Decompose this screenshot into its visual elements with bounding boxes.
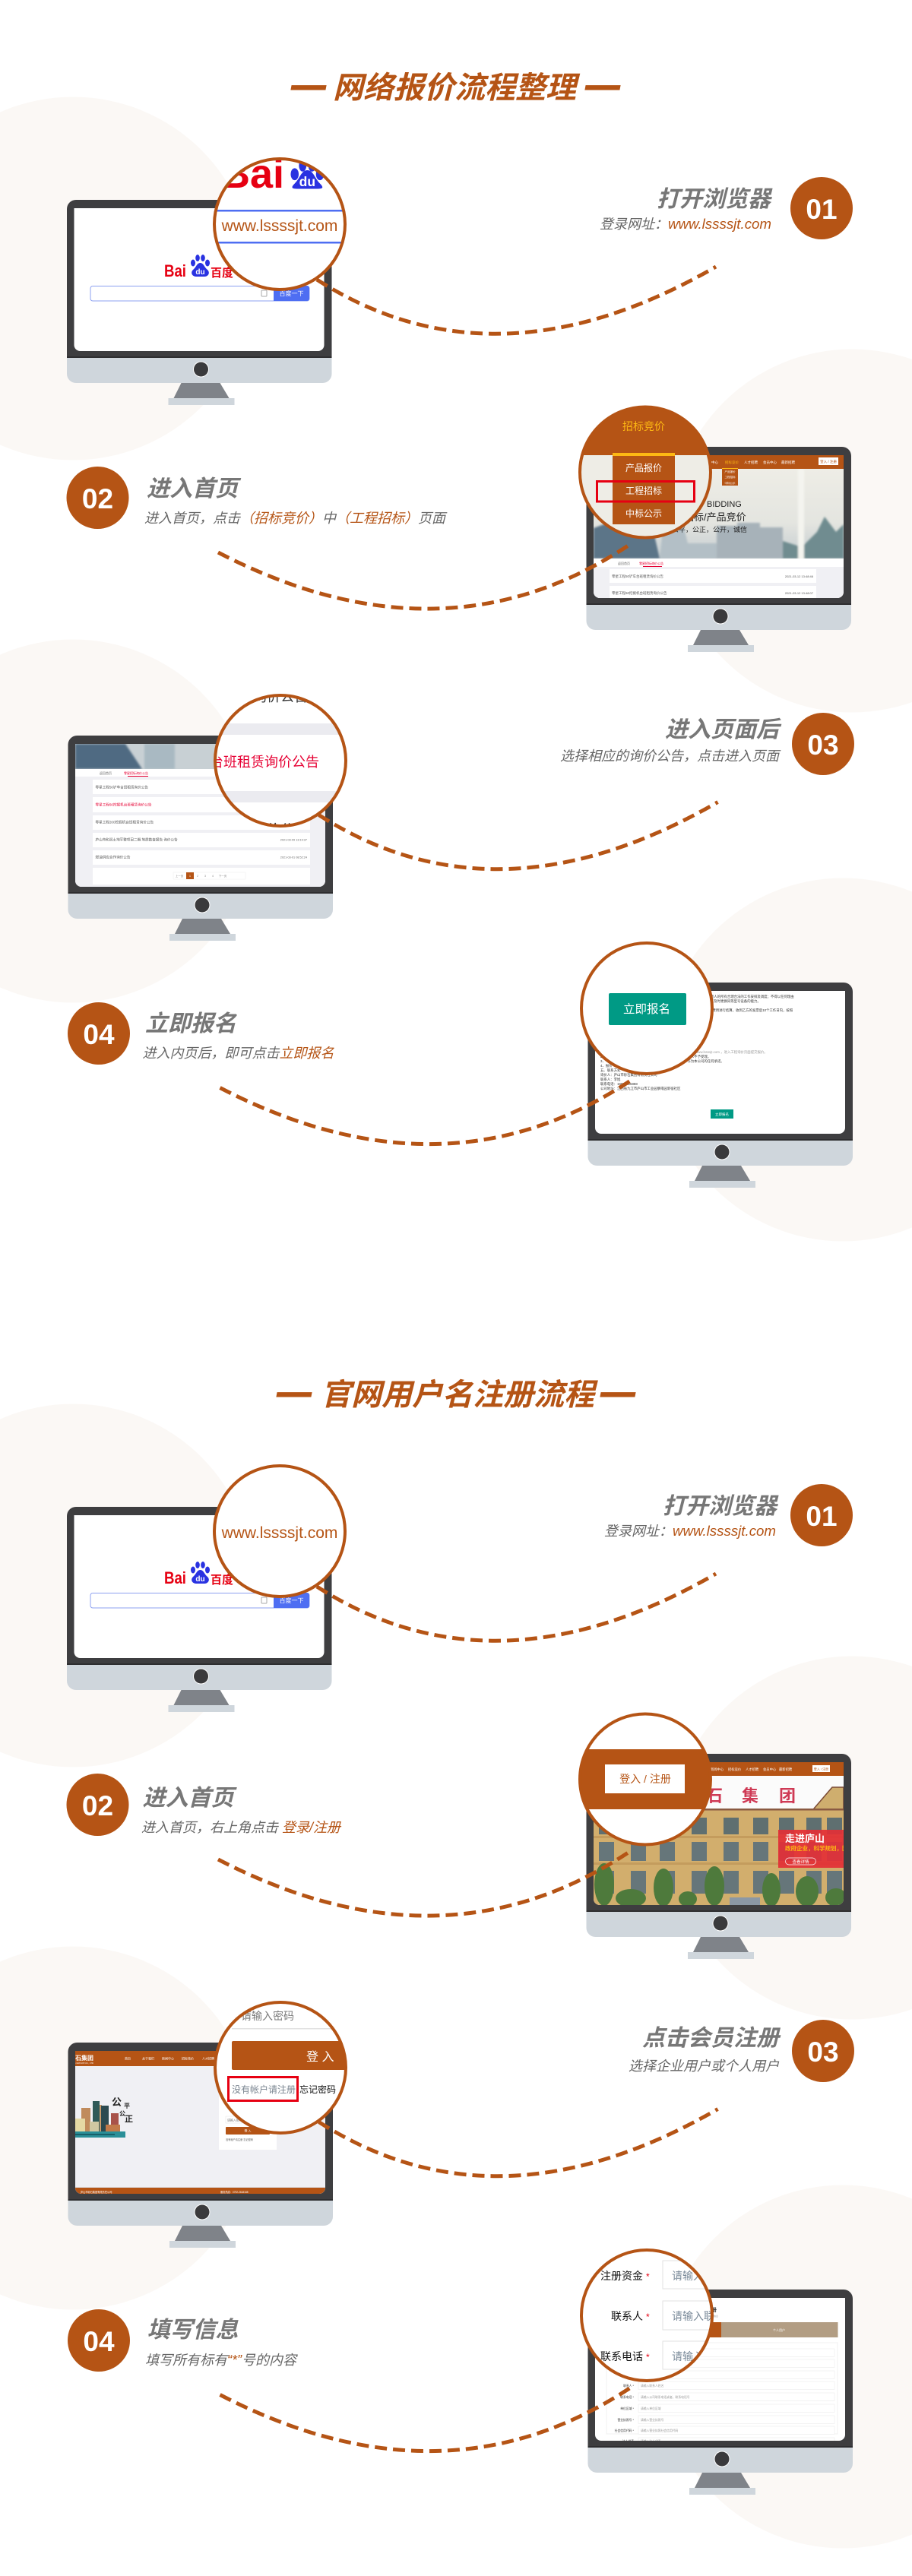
monitor 4: notice detail: 台半数据，每月5号双方就上月费用进行结算，收到乙方的发票后10个工作日内，按照 (600, 1008, 793, 1013)
monitor 6: group home page: 政府企业，科学规划，因地制宜 (785, 1844, 865, 1852)
magnifier 8: required fields: 请输入联系人 (672, 2310, 736, 2322)
monitor 7: login page: 庐山市砂石集团有限责任公司 (81, 2190, 112, 2194)
magnifier 2: bidding menu (578, 403, 714, 540)
monitor 7: login page: 登 入 (244, 2128, 252, 2132)
step 02 text: 进入首页 (147, 476, 242, 502)
magnifier 1: baidu address: Bai (220, 151, 284, 197)
monitor 6: group home page: 人才招聘 (746, 1767, 759, 1772)
monitor 2: bidding page: 产品报价 (725, 470, 736, 473)
magnifier 7: register link: 没有帐户请注册 (232, 2084, 296, 2095)
monitor 2: bidding page: 零星招标询价公告 (639, 561, 663, 565)
monitor 5: baidu home page: du (195, 1575, 205, 1584)
monitor 2: bidding page (587, 447, 851, 652)
monitor 8: registration form: 会员注册 (695, 2306, 717, 2313)
monitor 4: notice detail: 公司地址：江西省九江市庐山市工业园蓼南园新宿社区 (600, 1086, 681, 1091)
step 02 badge: 02 (82, 1790, 113, 1821)
step 04 text: 立即报名 (145, 1011, 238, 1036)
magnifier 5: site address: www.lssssjt.com (221, 1524, 337, 1542)
monitor 4: notice detail: 2、 询报价者，询价人不予受理。 (600, 1054, 711, 1059)
monitor 7: login page: 没有帐户请注册 忘记密码 (226, 2138, 253, 2141)
title: section one (291, 67, 620, 105)
dashed connector 8 (220, 2388, 631, 2451)
magnifier 3: notice title (214, 694, 347, 828)
step 01 badge (790, 1484, 853, 1546)
step 01 text: 打开浏览器 (657, 187, 773, 212)
title: section one: — (585, 67, 620, 104)
monitor 5: baidu home page: 百度 (211, 1573, 233, 1587)
monitor 7: login page: 招标竞价 (182, 2056, 194, 2061)
step 04 badge (68, 2309, 130, 2372)
monitor 2: bidding page: 登入 / 注册 (820, 459, 837, 464)
monitor 3: notice list: 1 (189, 875, 191, 878)
monitor 8: registration form: 社会信用代码 * (615, 2429, 635, 2432)
monitor 2: bidding page: 中标公示 (725, 481, 736, 485)
step 01 text (604, 1494, 779, 1539)
dashed connector 4 (220, 1081, 631, 1144)
title: section two: 官网用户名注册流程 (321, 1378, 598, 1412)
step 03 text (629, 2026, 781, 2074)
magnifier 4: register button (581, 942, 713, 1074)
monitor 2: bidding page: 招标竞价 (725, 460, 739, 465)
monitor 7: login page: 平 (124, 2103, 130, 2109)
monitor 2: bidding page: 公平，公正，公开，诚信 (672, 525, 747, 533)
monitor 7: login page: 公 (119, 2110, 125, 2117)
monitor 3: notice list: 2021-03-01 08:52:24 (280, 856, 307, 859)
monitor 7: login page: 请输入密码 (227, 2119, 242, 2122)
monitor 4: notice detail: 联系电话：19979026888 (600, 1081, 638, 1087)
magnifier 3: notice title: 机台班租赁询价公告 (196, 755, 319, 770)
monitor 3: notice list: 3 (204, 875, 206, 878)
monitor 8: registration form: 单位区域 * (620, 2407, 635, 2410)
monitor 4: notice detail: 配合我公司任命的现场管理负责人的所有合理合法的工作安排及调度；不得以任何理由 (600, 994, 794, 999)
magnifier 8: required fields: 联系电话 (600, 2350, 643, 2362)
monitor 3: notice list: 庐山市和润土地平整项目二期 地质勘查报告 询价公告 (96, 837, 178, 842)
monitor 2: bidding page: 2021-03-12 13:48:46 (785, 574, 814, 578)
monitor 3: notice list: 燃油供应合作询价公告 (96, 854, 131, 860)
step 04 text (145, 2318, 298, 2368)
monitor 8: registration form: 联系人 * (623, 2384, 635, 2388)
monitor 4: notice detail: 联系人：李旭 (600, 1077, 621, 1082)
monitor 1: baidu home page: Bai (164, 261, 186, 280)
monitor 6: group home page: 新闻中心 (711, 1767, 724, 1772)
monitor 5: baidu home page (67, 1507, 331, 1712)
step 02 badge: 02 (82, 483, 113, 514)
step 03 badge: 03 (807, 2036, 839, 2068)
step 04 text: 填写所有标有“*”号的内容 (145, 2353, 298, 2368)
dashed connector 6 (218, 1852, 629, 1916)
monitor 2: bidding page: 最新招聘 (781, 460, 795, 465)
monitor 7: login page: 首页 (125, 2056, 131, 2061)
magnifier 2: bidding menu: 招标竞价 (622, 420, 665, 432)
step 03 text: 选择相应的询价公告，点击进入页面 (560, 748, 781, 764)
step 01 text: 登录网址：www.lssssjt.com (600, 216, 771, 232)
monitor 8: registration form: 请输入单位区域 (641, 2407, 661, 2410)
monitor 7: login page: 砂石集团 (69, 2054, 93, 2062)
monitor 7: login page: STONE GROUP CO., LTD (68, 2062, 93, 2065)
monitor 6: group home page: 石 (706, 1786, 723, 1805)
monitor 2: bidding page: 零星工程60挖掘机台班租赁询价公告 (612, 590, 667, 596)
magnifier 8: required fields: * (646, 2312, 650, 2322)
step 04 badge (68, 1002, 130, 1065)
monitor 5: baidu home page: 百度一下 (280, 1597, 304, 1604)
title: section two: — (600, 1374, 635, 1411)
magnifier 2: bidding menu: 工程招标 (625, 485, 662, 496)
step 04 badge: 04 (83, 2326, 115, 2357)
step 03 badge: 03 (807, 729, 839, 761)
monitor 4: notice detail (588, 983, 853, 1188)
monitor 3: notice list: 下一页 (219, 875, 227, 878)
magnifier 8: required fields: 请输入 (672, 2270, 704, 2282)
monitor 4: notice detail: 五、联系方式 (600, 1068, 621, 1073)
monitor 8: registration form: 法人代表 (622, 2439, 634, 2443)
step 01 badge (790, 177, 853, 239)
monitor 3: notice list: 零星工程200挖掘机台班租赁询价公告 (96, 819, 154, 825)
monitor 1: baidu home page: 百度一下 (280, 290, 304, 297)
monitor 8: registration form (588, 2290, 853, 2495)
monitor 7: login page: 新闻中心 (162, 2056, 174, 2061)
monitor 1: baidu home page: du (195, 268, 205, 277)
step 01 badge: 01 (806, 194, 838, 225)
magnifier 3: notice title: 询价公告 (253, 689, 308, 704)
monitor 3: notice list: 上一页 (176, 874, 184, 878)
monitor 7: login page: 公 (112, 2097, 122, 2108)
monitor 7: login page (68, 2043, 333, 2248)
monitor 2: bidding page: 返回首页 (618, 561, 630, 565)
monitor 2: bidding page: BIDDING (707, 500, 742, 509)
monitor 8: registration form: 营业执照号 * (617, 2418, 635, 2422)
magnifier 8: required fields (580, 2248, 714, 2382)
step 01 text: 登录网址：www.lssssjt.com (604, 1523, 776, 1539)
monitor 4: notice detail: 4、报价 (600, 1063, 613, 1068)
title: section two (277, 1374, 635, 1412)
monitor 3: notice list: 零星工程50铲车台班租赁询价公告 (96, 784, 148, 790)
magnifier 8: required fields: * (646, 2352, 650, 2362)
monitor 6: group home page: 集 (742, 1786, 758, 1805)
step 04 badge: 04 (83, 1019, 115, 1050)
step 02 text: 进入首页，点击（招标竞价）中（工程招标）页面 (144, 511, 448, 526)
magnifier 8: required fields: 请输入 (672, 2350, 704, 2362)
monitor 6: group home page: 会员中心 (763, 1767, 777, 1772)
dashed connector 1 (317, 267, 716, 334)
monitor 3: notice list: 2 (197, 875, 198, 878)
monitor 2: bidding page: 零星工程50铲车台班租赁询价公告 (612, 574, 664, 579)
magnifier 6: login button (578, 1713, 714, 1845)
monitor 2: bidding page: 人才招聘 (744, 460, 758, 465)
monitor 4: notice detail: 现场的机械设备出现故障，需有及时更换同等型号设备的能力。 (600, 998, 761, 1004)
magnifier 4: register button: 立即报名 (623, 1002, 670, 1016)
step 04 text: 填写信息 (147, 2318, 239, 2343)
magnifier 3: notice title: 询价公告 (253, 822, 308, 837)
monitor 3: notice list (68, 736, 333, 941)
step 04 text: 进入内页后，即可点击立即报名 (143, 1046, 334, 1061)
magnifier 1: baidu address: du (299, 174, 315, 189)
monitor 2: bidding page: 工程招标 (725, 475, 736, 479)
monitor 6: group home page: 走进庐山 (785, 1833, 825, 1844)
monitor 2: bidding page: 招标/产品竞价 (684, 511, 746, 523)
magnifier 1: baidu address: www.lssssjt.com (221, 217, 337, 235)
monitor 3: notice list: 4 (212, 875, 214, 878)
magnifier 7: register link: 忘记密码 (299, 2084, 336, 2095)
dashed connector 3 (319, 802, 717, 869)
step 02 badge (67, 1774, 129, 1836)
step 02 text (141, 1786, 342, 1835)
magnifier 7: register link (214, 2002, 353, 2134)
magnifier 8: required fields: * (646, 2271, 650, 2282)
dashed connector 7 (319, 2109, 717, 2176)
title: section one: — (291, 67, 326, 104)
monitor 8: registration form: 请输入营业执照社会信用代码 (641, 2429, 679, 2432)
monitor 7: login page: 正 (125, 2114, 133, 2124)
magnifier 8: required fields: 联系人 (611, 2310, 643, 2322)
monitor 8: registration form: 联系电话 * (620, 2395, 635, 2399)
monitor 5: baidu home page: Bai (164, 1568, 186, 1587)
magnifier 7: register link: 请输入密码 (241, 2010, 294, 2022)
monitor 4: notice detail: 3、 价的依据，不作为本公司的任何承诺。 (600, 1059, 724, 1064)
step 03 text: 选择企业用户或个人用户 (629, 2059, 780, 2074)
monitor 8: registration form: 请输入公司联系电话或者，联系电话号 (641, 2395, 690, 2399)
monitor 6: group home page: 查看详情 (792, 1859, 809, 1865)
step 01 badge: 01 (806, 1501, 838, 1532)
magnifier 8: required fields: 注册资金 (600, 2270, 643, 2282)
monitor 3: notice list: 2021-03-09 13:19:37 (280, 839, 307, 842)
monitor 8: registration form: 请输入法人代表 (641, 2439, 661, 2443)
step 02 text: 进入首页 (143, 1786, 237, 1811)
monitor 6: group home page: 招标竞价 (728, 1767, 742, 1772)
step 03 badge (792, 2020, 854, 2082)
monitor 8: registration form: 请输入联系人姓名 (641, 2384, 664, 2388)
monitor 4: notice detail: 询价人：庐山市砂石集团有限责任公司 (600, 1072, 657, 1078)
monitor 7: login page: 人才招聘 (202, 2056, 214, 2061)
step 02 badge (67, 467, 129, 529)
step 01 text (600, 187, 773, 232)
step 04 text (143, 1011, 334, 1061)
monitor 8: registration form: 个人用户 (773, 2328, 785, 2332)
monitor 1: baidu home page: 百度 (211, 266, 233, 280)
monitor 7: login page: 关于我们 (142, 2056, 154, 2061)
monitor 6: group home page: 最新招聘 (779, 1767, 793, 1772)
magnifier 7: register link: 登 入 (306, 2050, 334, 2064)
monitor 7: login page: 服务热线：0792-2618188 (220, 2190, 249, 2194)
title: section one: 网络报价流程整理 (333, 71, 581, 105)
monitor 1: baidu home page (67, 200, 331, 405)
step 03 text (560, 717, 782, 764)
monitor 3: notice list: 返回首页 (100, 771, 112, 775)
dashed connector 2 (218, 545, 629, 609)
step 03 badge (792, 713, 854, 775)
monitor 2: bidding page: 会员中心 (763, 460, 777, 465)
monitor 6: group home page: 团 (779, 1786, 796, 1805)
magnifier 2: bidding menu: 中标公示 (625, 508, 662, 519)
monitor 6: group home page (587, 1754, 865, 1959)
step 03 text: 点击会员注册 (642, 2026, 781, 2051)
step 02 text: 进入首页，右上角点击 登录/注册 (141, 1820, 342, 1835)
magnifier 1: baidu address (213, 151, 347, 290)
magnifier 2: bidding menu: 产品报价 (625, 462, 662, 473)
monitor 6: group home page: 登入 / 注册 (814, 1766, 828, 1771)
monitor 8: registration form: 请填写真实有效的信息 (695, 2314, 718, 2318)
monitor 4: notice detail: www.lssssjt.com ，进入工程询价页面提交报价。 (695, 1049, 768, 1055)
monitor 8: registration form: 请输入营业执照号 (641, 2418, 664, 2422)
step 02 text (144, 476, 448, 526)
magnifier 5: site address (214, 1465, 346, 1597)
dashed connector 5 (317, 1574, 716, 1641)
monitor 2: bidding page: 2021-03-12 13:48:07 (785, 591, 814, 595)
title: section two: — (277, 1374, 312, 1411)
magnifier 6: login button: 登入 / 注册 (619, 1773, 671, 1785)
monitor 3: notice list: 零星招标询价公告 (124, 771, 148, 775)
monitor 2: bidding page: 中心 (711, 460, 718, 465)
step 03 text: 进入页面后 (665, 717, 782, 742)
monitor 3: notice list: 零星工程60挖掘机台班租赁询价公告 (96, 802, 152, 807)
monitor 4: notice detail: 立即报名 (715, 1112, 729, 1117)
step 01 text: 打开浏览器 (663, 1494, 779, 1519)
